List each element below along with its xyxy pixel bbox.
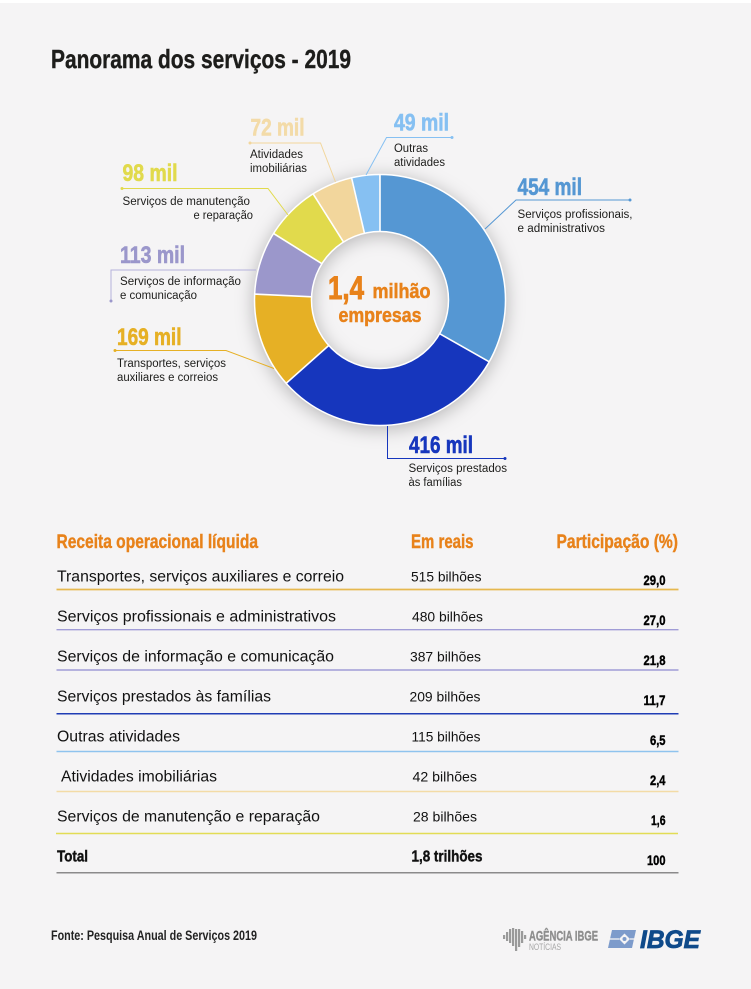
callout: 98 mil [120,160,288,222]
row: outras: Outras atividades [57,729,180,746]
callout: 98 mil: e reparação [194,210,253,222]
donut chart [254,174,506,426]
row: total: Total [57,849,88,866]
row: famílias: 11,7 [644,693,666,708]
callout: 72 mil [248,114,336,182]
callout: 416 mil: 416 mil [409,432,473,459]
callout: 113 mil: Serviços de informação [120,276,241,288]
callout: 113 mil: e comunicação [120,290,197,302]
callout: 72 mil: imobiliárias [250,163,307,175]
row: transportes: 29,0 [644,573,666,588]
row: informação: 21,8 [644,653,666,668]
row: profissionais: 27,0 [644,613,666,628]
row: famílias: Serviços prestados às famílias [57,688,271,706]
logo: Agência IBGE Notícias [503,927,598,953]
row: outras [56,729,678,752]
row: total: 100 [647,853,666,868]
callout: 454 mil: e administrativos [518,223,605,235]
row: outras: 6,5 [650,733,666,748]
row: transportes: Transportes, serviços auxiliares e correio [57,569,344,586]
logo: Agência IBGE Notícias: NOTÍCIAS [529,942,561,953]
callout: 98 mil: Serviços de manutenção [122,196,250,208]
row: total: 1,8 trilhões [412,849,483,866]
source note: Fonte: Pesquisa Anual de Serviços 2019 [51,928,257,943]
donut centre total: empresas [338,305,422,327]
callout: 169 mil: Transportes, serviços [117,358,226,370]
table: receita operacional líquida [56,532,678,873]
callout: 49 mil: atividades [394,157,445,169]
row: imobiliárias [56,769,678,792]
title: Panorama dos serviços - 2019 [51,44,351,74]
logo: Agência IBGE Notícias: AGÊNCIA IBGE [529,927,598,944]
donut centre total: 1,4 [328,270,364,306]
donut centre total: milhão [372,281,430,303]
callout: 169 mil: auxiliares e correios [117,372,218,384]
row: manutenção: Serviços de manutenção e reparação [57,809,320,826]
logo: IBGE: IBGE [640,926,701,954]
row: manutenção: 28 bilhões [413,809,477,825]
row: famílias [56,688,678,714]
table header: Receita operacional líquida [56,532,258,553]
callout: 454 mil [485,174,632,235]
logo: IBGE [608,926,701,954]
table header [56,532,678,553]
callout: 454 mil: Serviços profissionais, [518,209,632,221]
callout: 454 mil: 454 mil [518,174,582,201]
callout: 72 mil: 72 mil [250,114,304,142]
row: profissionais [56,608,678,630]
row: profissionais: Serviços profissionais e administrativos [57,608,336,626]
callout: 113 mil [110,242,256,302]
row: informação: Serviços de informação e comunicação [57,648,334,666]
row: famílias: 209 bilhões [410,688,480,704]
row: imobiliárias: 42 bilhões [412,769,477,785]
callout: 416 mil: às famílias [408,477,462,489]
callout: 72 mil: Atividades [250,149,303,161]
callout: 169 mil [114,324,274,384]
table header: Em reais [411,532,474,553]
callout: 49 mil [366,110,454,175]
row: manutenção [56,809,678,834]
callout: 49 mil: Outras [394,143,428,155]
donut centre total [328,270,430,327]
row: imobiliárias: 2,4 [650,773,666,788]
callout: 169 mil: 169 mil [117,324,182,351]
row: informação: 387 bilhões [410,648,481,664]
callout: 416 mil: Serviços prestados [408,463,507,475]
row: transportes [56,569,678,590]
callout: 49 mil: 49 mil [394,110,449,137]
row: informação [56,648,678,670]
row: outras: 115 bilhões [412,729,480,745]
row: profissionais: 480 bilhões [412,608,483,624]
row: manutenção: 1,6 [651,813,666,828]
callout: 416 mil [388,426,507,489]
table header: Participação (%) [556,532,678,553]
row: total [56,849,678,873]
row: imobiliárias: Atividades imobiliárias [61,769,217,786]
callout: 98 mil: 98 mil [122,160,178,187]
row: transportes: 515 bilhões [411,569,482,585]
callout: 113 mil: 113 mil [120,242,185,269]
